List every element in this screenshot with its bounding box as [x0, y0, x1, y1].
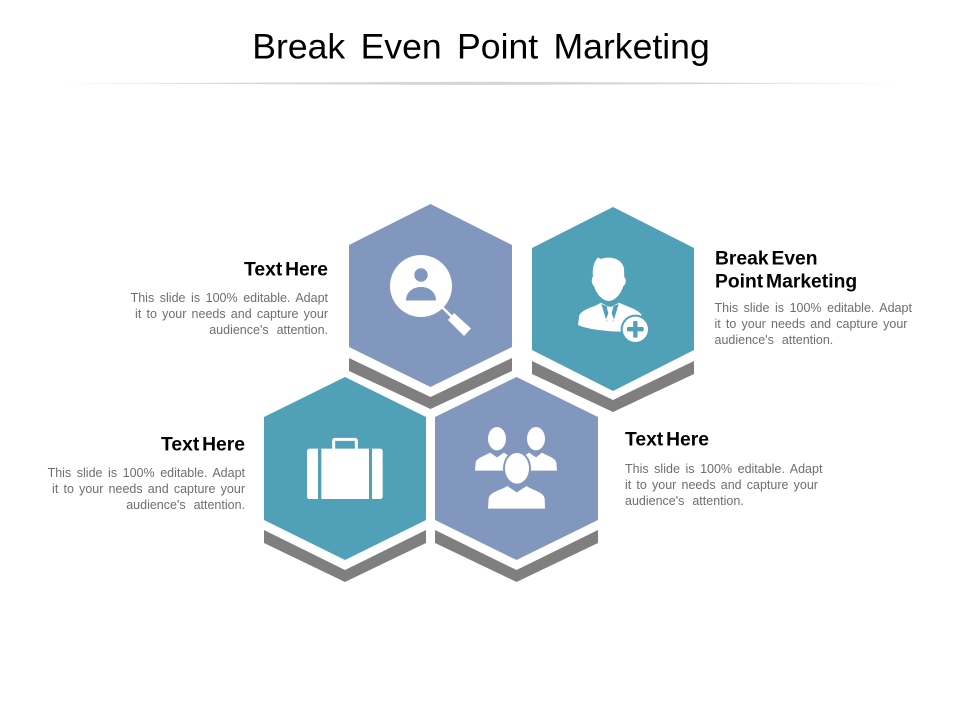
heading	[715, 248, 857, 292]
body text: audience's attention.	[714, 333, 833, 347]
body text: This slide is 100% editable. Adapt	[625, 462, 823, 476]
icon: group of people	[475, 427, 557, 509]
text block: bottom left	[48, 434, 246, 512]
hexagon shadow chevron	[349, 358, 512, 409]
body text: audience's attention.	[209, 323, 328, 337]
body text: it to your needs and capture your	[135, 307, 328, 321]
body text	[131, 291, 329, 337]
body text	[714, 301, 912, 347]
body text: it to your needs and capture your	[52, 482, 245, 496]
body text	[48, 466, 246, 512]
body text: This slide is 100% editable. Adapt	[714, 301, 912, 315]
hexagon	[264, 377, 426, 560]
body text: This slide is 100% editable. Adapt	[131, 291, 329, 305]
text block: bottom right	[625, 430, 823, 508]
body text: audience's attention.	[625, 494, 744, 508]
panel: hexagon top left, search person	[349, 204, 512, 409]
hexagon	[532, 207, 694, 391]
body text: it to your needs and capture your	[625, 478, 818, 492]
hexagon shadow chevron	[435, 530, 598, 582]
body text: it to your needs and capture your	[714, 317, 907, 331]
heading: Point Marketing	[715, 272, 857, 292]
panel: hexagon bottom right, team	[435, 377, 598, 582]
hexagon	[349, 204, 512, 387]
heading: Break Even	[715, 248, 818, 270]
icon: businessman with plus	[578, 257, 650, 344]
title: Break Even Point Marketing	[252, 26, 710, 66]
panel: hexagon bottom left, briefcase	[264, 377, 426, 582]
body text: This slide is 100% editable. Adapt	[48, 466, 246, 480]
icon: briefcase	[307, 439, 383, 499]
heading: Text Here	[625, 430, 709, 450]
icon: magnifier with person	[390, 255, 471, 336]
text block: top right	[714, 248, 912, 347]
heading: Text Here	[161, 434, 245, 456]
panel: hexagon top right, businessman	[532, 207, 694, 412]
hexagon	[435, 377, 598, 560]
body text: audience's attention.	[126, 498, 245, 512]
hexagon shadow chevron	[264, 530, 426, 582]
body text	[625, 462, 823, 508]
hexagon shadow chevron	[532, 361, 694, 412]
text block: top left	[131, 260, 329, 337]
heading: Text Here	[244, 260, 328, 280]
